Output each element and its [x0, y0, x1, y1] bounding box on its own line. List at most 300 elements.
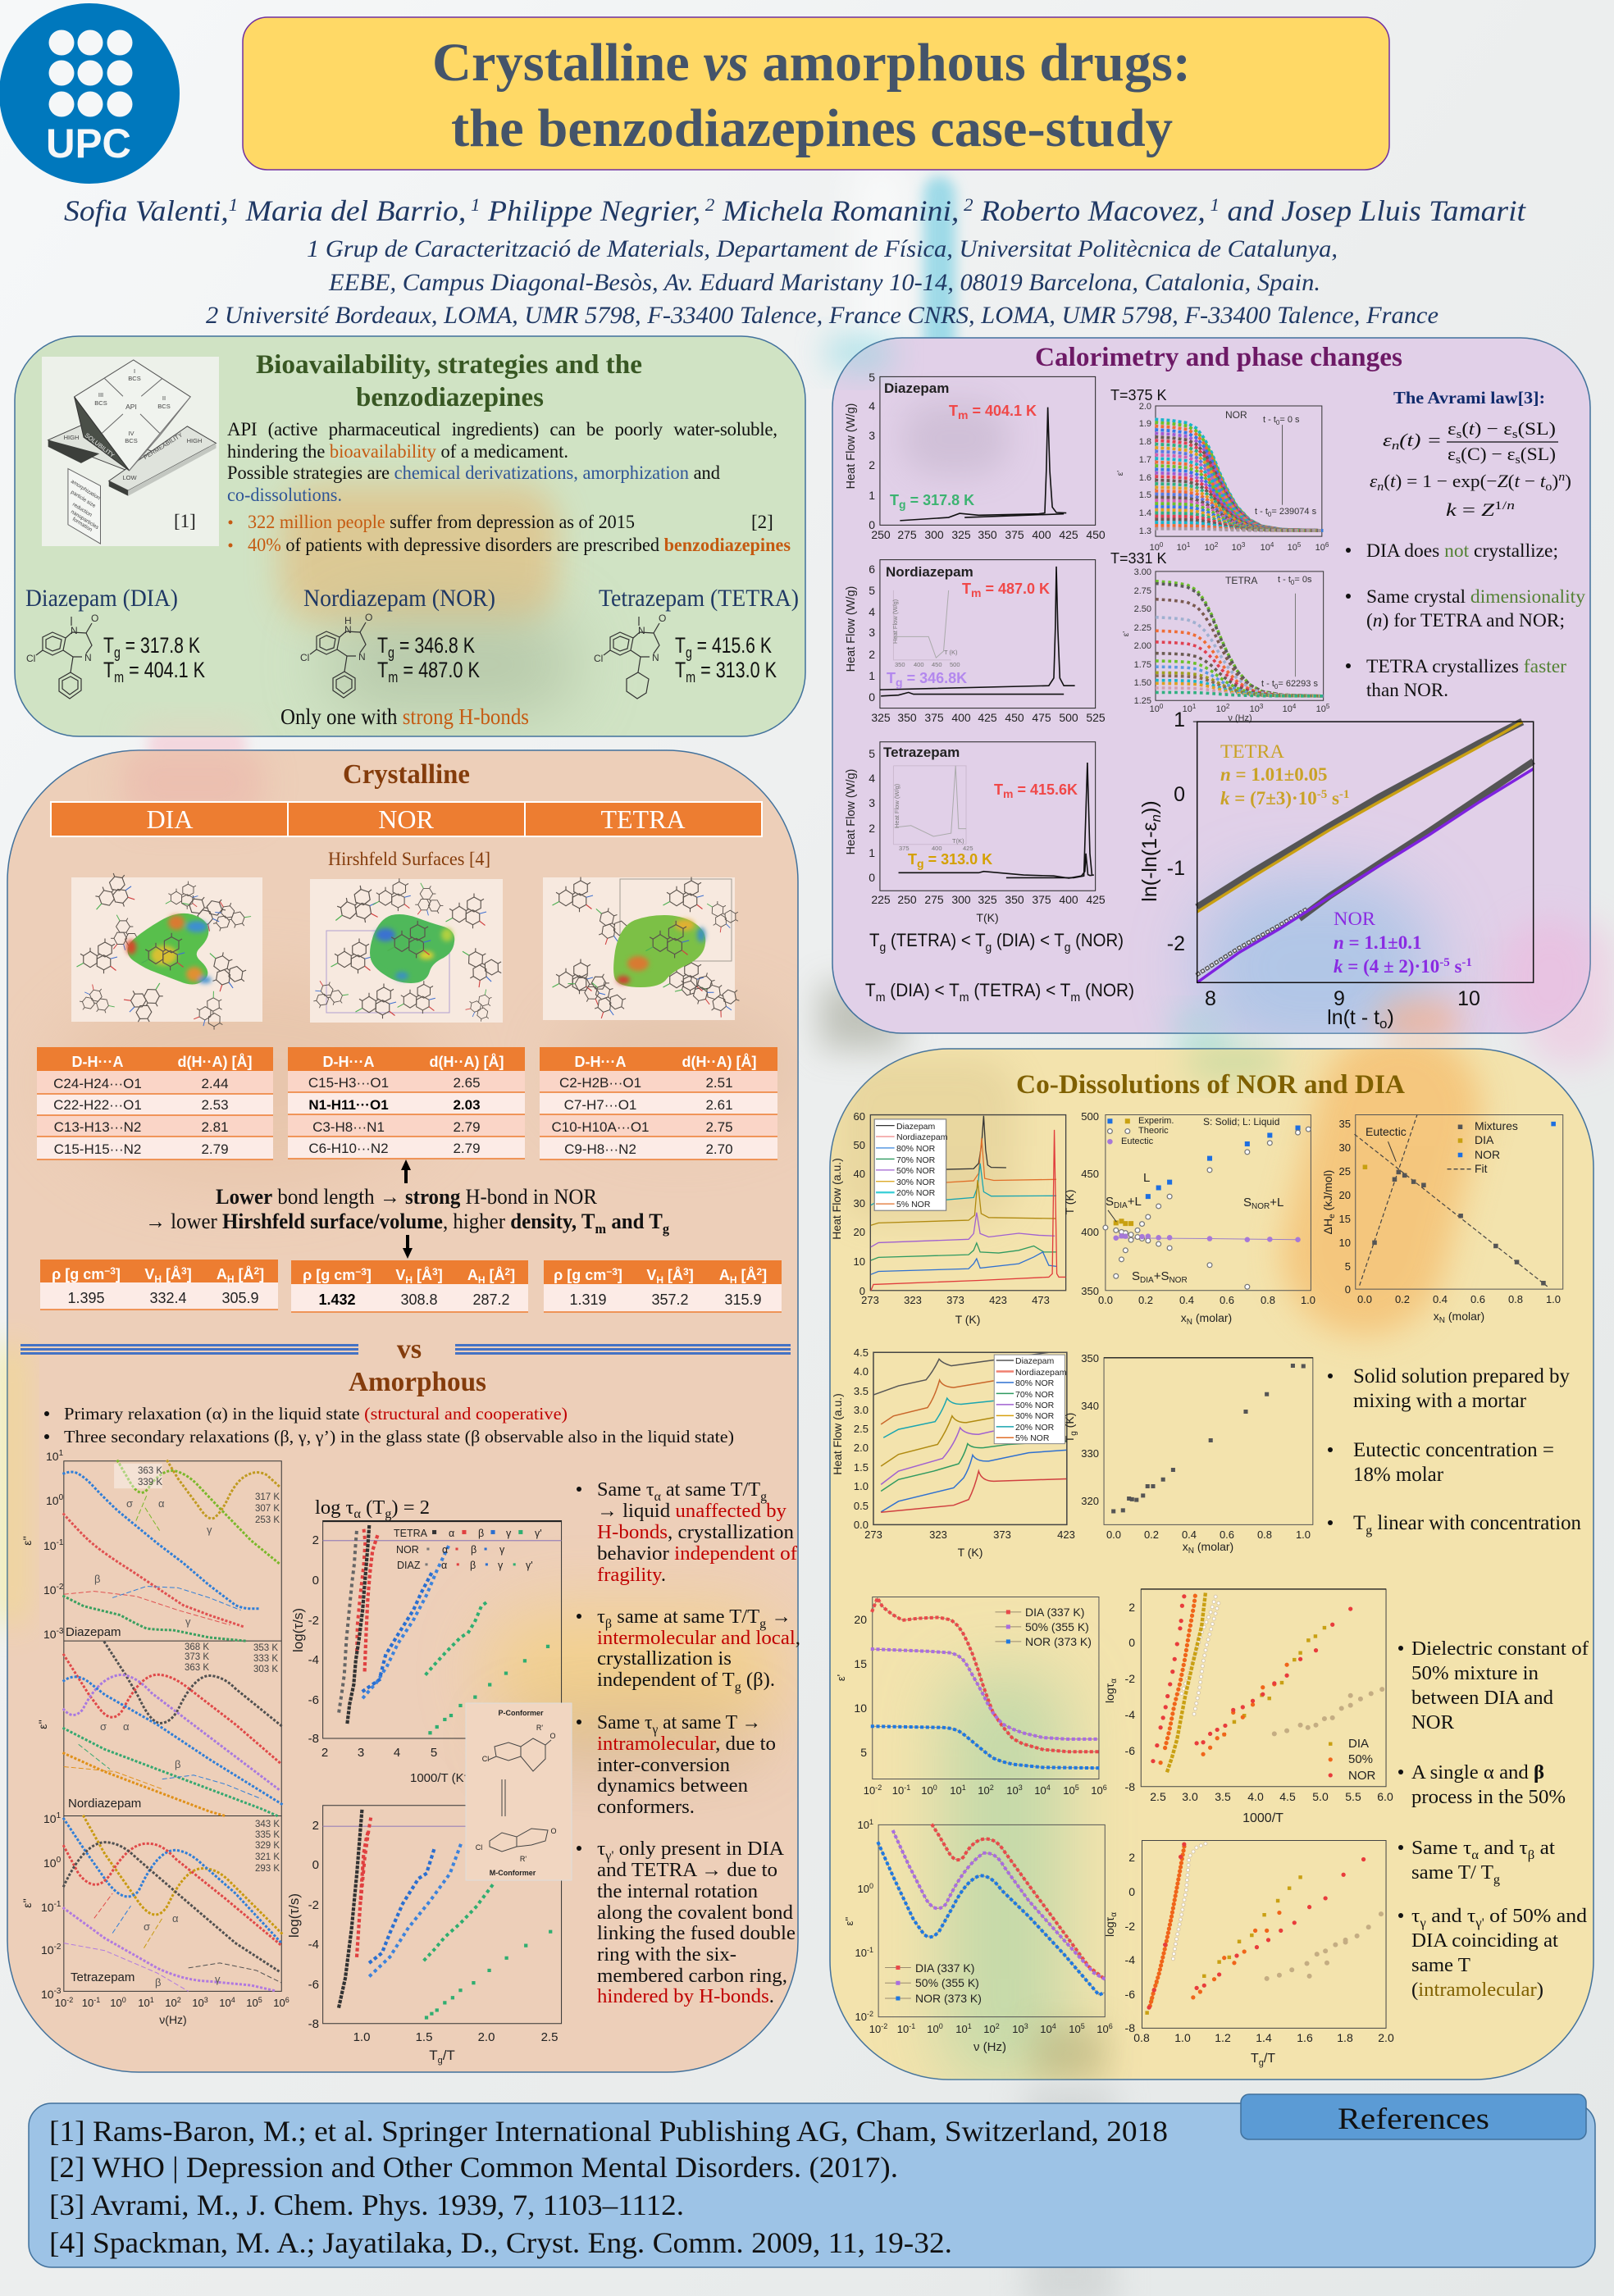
chart: time-resolved permittivity NOR: 10: [1288, 543, 1297, 553]
chart: melting enthalpy: [1321, 1115, 1563, 1325]
chart: heat flow glass transition: 3.0: [854, 1404, 869, 1416]
chart: melting enthalpy: 15: [1339, 1213, 1351, 1225]
chart: heat flow melting: 50% NOR: [896, 1166, 936, 1176]
chart: dielectric loss spectra: α: [172, 1912, 179, 1925]
chart: loss mixtures: 6: [1109, 2022, 1113, 2030]
table: H-bonds DIA: 2.44: [201, 1076, 229, 1091]
chart: relaxation map vs 1000/T: γ: [498, 1560, 504, 1571]
text block: relaxation conclusions: (β).: [741, 1669, 775, 1691]
chart: permittivity mixtures: 10: [892, 1784, 904, 1797]
drug: diazepam: m: [114, 669, 124, 686]
table: properties TETRA: 357.2: [651, 1292, 689, 1308]
chart: permittivity mixtures: 0: [933, 1784, 937, 1792]
text block: mixture bullets: NOR: [1411, 1711, 1455, 1733]
chart: DSC nordiazepam: 350: [895, 661, 905, 668]
chart: relaxation map vs Tg/T: T: [429, 2048, 438, 2063]
chart: dielectric loss spectra: α: [123, 1720, 130, 1733]
authors: Philippe Negrier,: [481, 194, 700, 227]
chart: DSC tetrazepam: 400: [1059, 893, 1078, 906]
chart: DSC diazepam: 4: [869, 399, 875, 412]
chart: DSC nordiazepam: 6: [869, 563, 875, 576]
chart: heat flow glass transition: 323: [929, 1528, 947, 1541]
chart: loss mixtures: 10: [1097, 2023, 1109, 2035]
chart: melting enthalpy: (molar): [1445, 1310, 1484, 1323]
drug: nordiazepam: = 487.0 K: [398, 658, 480, 682]
chart: relaxation map vs Tg/T: 2: [312, 1819, 319, 1833]
image: conformers inset: R': [536, 1724, 543, 1732]
chart: dielectric loss spectra: 10: [43, 1856, 57, 1870]
chart: time-resolved permittivity NOR: 10: [1205, 543, 1215, 553]
chart: DSC diazepam: 1: [869, 489, 875, 502]
table: properties NOR: [Å: [485, 1267, 504, 1283]
text block: relaxation conclusions: fragility.: [597, 1564, 666, 1586]
chart: phase diagram: S: Solid; L: Liquid: [1203, 1116, 1279, 1128]
text block: relaxation conclusions: membered carbon ring,: [597, 1965, 787, 1987]
heading: vs: vs: [397, 1334, 422, 1364]
chart: dielectric loss spectra: -1: [93, 1996, 100, 2004]
text block: reference list: [3] Avrami, M., J. Chem. Phys. 1939, 7, 1103–1112.: [49, 2189, 684, 2221]
text block: relaxation conclusions: along the covalent bond: [597, 1902, 793, 1924]
chart: DSC tetrazepam: 4: [869, 772, 875, 785]
text block: solid solution bullets: mixing with a mortar: [1353, 1390, 1527, 1412]
chart: dielectric loss spectra: 1: [150, 1996, 154, 2004]
chart: Avrami fit: 1: [1174, 708, 1185, 731]
table: properties DIA: ]: [259, 1266, 264, 1282]
chart: loss mixtures: 10: [855, 1947, 867, 1959]
chart: heat flow glass transition: 1.0: [854, 1480, 869, 1492]
table: H-bonds TETRA: [540, 1047, 777, 1159]
text block: mixture bullets: Dielectric constant of: [1411, 1638, 1589, 1660]
chart: Avrami fit: o: [1379, 1016, 1388, 1032]
chart: DSC tetrazepam: 425: [963, 845, 973, 852]
drug: diazepam: [25, 585, 205, 699]
chart: Tg vs concentration: g: [1069, 1431, 1078, 1436]
chart: dielectric loss spectra: Diazepam: [66, 1625, 121, 1639]
chart: permittivity mixtures: 6: [1103, 1784, 1107, 1792]
chart: mixture relaxation map vs Tg/T: 0.8: [1133, 2031, 1150, 2044]
chart: permittivity mixtures: 10: [1006, 1784, 1019, 1797]
chart: relaxation map vs 1000/T: 2: [312, 1533, 319, 1547]
text block: mixture bullets: at: [1534, 1837, 1555, 1859]
chart: dielectric loss spectra: 333 K: [253, 1654, 278, 1664]
chart: mixture relaxation map vs Tg/T: /T: [1264, 2052, 1275, 2066]
chart: dielectric loss spectra: 10: [192, 1997, 204, 2009]
text block: Avrami law equations: (C) − ε: [1461, 444, 1516, 464]
chart: melting enthalpy: 30: [1339, 1141, 1351, 1154]
drug: diazepam: N: [71, 625, 78, 636]
text block: mixture bullets: 50% mixture in: [1411, 1662, 1539, 1684]
chart: time-resolved permittivity TETRA: = 62293 s: [1278, 679, 1318, 689]
chart: Tg vs concentration: 0.8: [1257, 1528, 1272, 1541]
chart: permittivity mixtures: 10: [864, 1784, 875, 1797]
text block: intro: 322 million people suffer from depression as of 2015: [248, 512, 635, 532]
chart: Avrami fit: TETRA: [1220, 741, 1284, 762]
table: properties DIA: [Å: [162, 1266, 181, 1282]
drug: tetrazepam: T: [675, 633, 689, 658]
chart: relaxation map vs 1000/T: DIAZ: [397, 1560, 421, 1571]
chart: time-resolved permittivity NOR: 1: [1187, 541, 1191, 549]
text block: relaxations: Primary relaxation (α) in the liquid state (structural and cooperative): [64, 1404, 568, 1424]
chart: melting enthalpy: e: [1328, 1214, 1337, 1219]
chart: mixture relaxation map vs Tg/T: α: [1110, 1912, 1119, 1917]
authors: 1: [466, 194, 481, 215]
chart: dielectric loss spectra: 343 K: [255, 1820, 280, 1829]
chart: loss mixtures: 10: [983, 2023, 996, 2035]
chart: DSC tetrazepam: 1: [869, 846, 875, 859]
chart: time-resolved permittivity NOR: 10: [1150, 543, 1160, 553]
chart: Tg vs concentration: 330: [1081, 1447, 1099, 1460]
affiliations: [206, 235, 1438, 329]
chart: time-resolved permittivity TETRA: 10: [1283, 704, 1293, 714]
table: properties TETRA: H: [656, 1274, 663, 1286]
chart: dielectric loss spectra: 6: [285, 1996, 290, 2004]
chart: dielectric loss spectra: 339 K: [138, 1478, 162, 1487]
chart: heat flow glass transition: 4.0: [854, 1365, 869, 1378]
chart: mixture relaxation map vs 1000/T: -2: [1125, 1672, 1135, 1685]
chart: dielectric loss spectra: 363 K: [185, 1663, 209, 1673]
text block: solid solution bullets: linear with concentration: [1372, 1512, 1581, 1534]
chart: phase diagram: 450: [1081, 1168, 1099, 1180]
chart: DSC diazepam: Diazepam: [884, 380, 949, 396]
chart: heat flow melting: 50: [854, 1139, 865, 1151]
chart: dielectric loss spectra: 368 K: [185, 1642, 209, 1652]
chart: DSC nordiazepam: 375: [924, 711, 944, 724]
heading: crystalline: Crystalline: [343, 759, 470, 790]
chart: relaxation map vs Tg/T: [286, 1806, 562, 2066]
chart: DSC diazepam: 0: [869, 518, 875, 531]
table: H-bonds DIA: [37, 1047, 273, 1159]
chart: DSC nordiazepam: 5: [869, 584, 875, 597]
authors: 1: [229, 194, 238, 215]
table: properties NOR: A: [467, 1267, 478, 1283]
text block: mixture bullets: [1398, 1638, 1589, 2001]
chart: heat flow melting: 273: [861, 1294, 879, 1306]
chart: dielectric loss spectra: 373 K: [185, 1652, 209, 1662]
text block: Tg and Tm ordering: (DIA) < T: [886, 980, 960, 1000]
panel: co-dissolutions: [830, 1011, 1593, 2083]
image: conformers inset: P-Conformer: [498, 1709, 544, 1717]
chart: DSC tetrazepam: 3: [869, 796, 875, 809]
chart: mixture relaxation map vs 1000/T: [1103, 1589, 1393, 1825]
table: H-bonds DIA: D-H···A: [72, 1054, 123, 1070]
panel: bioavailability: [15, 336, 805, 754]
chart: dielectric loss spectra: 3: [204, 1996, 208, 2004]
chart: loss mixtures: -2: [881, 2022, 887, 2030]
chart: permittivity mixtures: 4: [1046, 1784, 1051, 1792]
table: H-bonds TETRA: d(H··A) [Å]: [682, 1054, 756, 1070]
chart: relaxation map vs 1000/T: -2: [308, 1614, 319, 1628]
chart: time-resolved permittivity TETRA: 10: [1150, 704, 1160, 714]
chart: phase diagram: S: [1243, 1196, 1252, 1210]
chart: Tg vs concentration: (K): [1063, 1413, 1076, 1431]
table: properties NOR: [291, 1260, 528, 1312]
chart: dielectric loss spectra: 307 K: [255, 1504, 280, 1514]
chart: time-resolved permittivity TETRA: 3: [1260, 703, 1264, 710]
chart: DSC tetrazepam: m: [1003, 787, 1013, 800]
chart: time-resolved permittivity NOR: 0: [1276, 419, 1280, 426]
drug: nordiazepam: [300, 585, 495, 698]
image: conformers inset: Cl: [482, 1755, 489, 1763]
text block: Avrami law equations: o: [1545, 481, 1552, 494]
text block: Avrami law equations: ε: [1370, 471, 1378, 491]
chart: time-resolved permittivity TETRA: ν (Hz): [1228, 713, 1252, 723]
chart: relaxation map vs Tg/T: 2.5: [541, 2030, 558, 2044]
text block: Tg and Tm ordering: (TETRA) < T: [886, 930, 986, 950]
title: Crystalline vs amorphous drugs:: [432, 33, 1191, 93]
text block: mixture bullets: γ': [1475, 1916, 1484, 1930]
icon: BCS diagram: BCS: [94, 399, 107, 407]
chart: heat flow melting: 5% NOR: [896, 1200, 931, 1210]
chart: melting enthalpy: 0.8: [1508, 1293, 1523, 1305]
chart: DSC nordiazepam: 500: [950, 661, 960, 668]
authors: Sofia Valenti,: [64, 194, 221, 227]
drug: nordiazepam: H: [344, 615, 352, 626]
table: properties TETRA: −3: [606, 1266, 618, 1278]
chart: DSC diazepam: T: [890, 492, 899, 508]
chart: time-resolved permittivity NOR: 10: [1177, 543, 1187, 553]
heading: amorphous: Amorphous: [349, 1367, 486, 1397]
chart: heat flow glass transition: 2.0: [854, 1442, 869, 1454]
table: properties DIA: 305.9: [221, 1290, 259, 1306]
chart: Avrami fit: )): [1138, 800, 1161, 814]
chart: heat flow glass transition: 0.0: [854, 1519, 869, 1531]
chart: phase diagram: 0.0: [1098, 1294, 1113, 1306]
chart: DSC tetrazepam: T(K): [976, 911, 999, 924]
table: properties NOR: 308.8: [400, 1292, 438, 1308]
chart: dielectric loss spectra: 0: [57, 1856, 62, 1865]
table: H-bonds TETRA: D-H···A: [575, 1054, 626, 1070]
chart: Avrami fit: ln(-ln(1-ε: [1138, 822, 1161, 902]
image: conformers inset: O: [550, 1827, 557, 1835]
chart: heat flow melting: Diazepam: [896, 1122, 936, 1132]
chart: relaxation map vs 1000/T: γ': [535, 1528, 542, 1539]
chart: permittivity mixtures: 5: [1075, 1784, 1079, 1792]
chart: dielectric loss spectra: σ: [144, 1920, 150, 1933]
chart: DSC tetrazepam: 400: [932, 845, 942, 852]
text block: mixture bullets: g: [1493, 1873, 1500, 1887]
text block: bond length conclusion: Lower bond length → strong H-bond in NOR: [216, 1185, 598, 1209]
image: conformers inset: [466, 1703, 572, 1880]
chart: time-resolved permittivity TETRA: 4: [1293, 703, 1297, 710]
chart: DSC diazepam: 275: [897, 528, 917, 541]
chart: heat flow melting: T (K): [955, 1313, 980, 1326]
chart: permittivity mixtures: 10: [1034, 1784, 1046, 1797]
chart: mixture relaxation map vs 1000/T: 2: [1128, 1601, 1135, 1614]
icon: BCS diagram: LOW: [122, 474, 137, 481]
chart: mixture relaxation map vs 1000/T: 6.0: [1377, 1790, 1393, 1803]
table: properties DIA: [40, 1260, 278, 1310]
table: H-bonds TETRA: 2.61: [705, 1097, 733, 1113]
chart: heat flow melting: 473: [1032, 1294, 1050, 1306]
chart: phase diagram: S: [1132, 1269, 1140, 1283]
chart: time-resolved permittivity TETRA: 2.75: [1134, 586, 1151, 596]
chart: heat flow glass transition: 423: [1057, 1528, 1075, 1541]
chart: dielectric loss spectra: 10: [43, 1628, 57, 1641]
chart: time-resolved permittivity TETRA: 10: [1250, 704, 1260, 714]
image: NOR Hirshfeld surface: [310, 878, 508, 1026]
chart: loss mixtures: 10: [858, 1883, 869, 1895]
chart: relaxation map vs 1000/T: ): [472, 1771, 476, 1785]
chart: heat flow glass transition: 3.5: [854, 1385, 869, 1397]
chart: DSC nordiazepam: = 346.8K: [903, 670, 967, 686]
chart: heat flow glass transition: 0.5: [854, 1500, 869, 1512]
chart: time-resolved permittivity TETRA: 1.75: [1134, 660, 1151, 670]
text block: solid solution bullets: Eutectic concentration =: [1353, 1439, 1554, 1461]
chart: DSC tetrazepam: Heat Flow (W/g): [845, 769, 858, 854]
chart: DSC nordiazepam: m: [971, 586, 981, 599]
chart: melting enthalpy: 10: [1339, 1237, 1351, 1249]
chart: mixture relaxation map vs 1000/T: 5.5: [1345, 1790, 1361, 1803]
table: properties DIA: ]: [187, 1266, 192, 1282]
chart: time-resolved permittivity NOR: = 0 s: [1279, 415, 1300, 425]
icon: BCS diagram: API: [125, 403, 137, 411]
text block: Avrami law equations: k = Z: [1446, 499, 1491, 520]
chart: mixture relaxation map vs Tg/T: T: [1251, 2052, 1259, 2066]
chart: time-resolved permittivity TETRA: TETRA: [1225, 575, 1257, 586]
table: H-bonds DIA: 2.79: [201, 1141, 229, 1157]
chart: permittivity mixtures: -2: [875, 1784, 882, 1792]
chart: melting enthalpy: DIA: [1475, 1133, 1494, 1146]
chart: dielectric loss spectra: β: [155, 1976, 161, 1988]
chart: DSC tetrazepam: 325: [978, 893, 997, 906]
text block: mixture bullets: A single α and β: [1411, 1761, 1544, 1784]
chart: Avrami fit: -1: [1461, 956, 1472, 969]
drug: diazepam: N: [84, 652, 92, 663]
table: H-bonds TETRA: 2.75: [705, 1119, 733, 1135]
chart: heat flow melting: 20: [854, 1226, 865, 1238]
icon: BCS diagram: nanoparticles: [70, 509, 100, 531]
chart: phase diagram: 400: [1081, 1226, 1099, 1238]
chart: phase diagram: NOR: [1169, 1276, 1188, 1285]
table: H-bonds NOR: 2.03: [453, 1097, 481, 1113]
chart: DSC diazepam: 250: [871, 528, 891, 541]
text block: crystallization bullets: Same crystal dimensionality: [1366, 586, 1586, 607]
text block: solid solution bullets: g: [1366, 1524, 1372, 1538]
chart: time-resolved permittivity TETRA: 10: [1316, 704, 1326, 714]
chart: loss mixtures: 1: [968, 2022, 972, 2030]
chart: heat flow glass transition: 70% NOR: [1015, 1390, 1055, 1400]
drug: diazepam: O: [91, 613, 98, 624]
chart: mixture relaxation map vs Tg/T: 1.4: [1256, 2031, 1272, 2044]
chart: relaxation map vs Tg/T: -6: [308, 1978, 319, 1992]
chart: time-resolved permittivity TETRA: 10: [1183, 704, 1192, 714]
chart: mixture relaxation map vs Tg/T: -8: [1125, 2021, 1135, 2034]
chart: permittivity mixtures: ε': [835, 1674, 847, 1681]
chart: Tg vs concentration: [1063, 1352, 1313, 1556]
chart: DSC nordiazepam: [845, 560, 1106, 724]
chart: relaxation map vs Tg/T: -4: [308, 1938, 319, 1952]
drug: tetrazepam: = 415.6 K: [692, 633, 772, 658]
chart: Avrami fit: s: [1327, 788, 1339, 809]
chart: heat flow melting: 40: [854, 1168, 865, 1180]
chart: DSC diazepam: m: [958, 408, 968, 421]
chart: dielectric loss spectra: 10: [219, 1997, 231, 2009]
text block: mixture bullets: of 50% and: [1484, 1905, 1587, 1927]
chart: loss mixtures: 1: [869, 1818, 873, 1826]
chart: melting enthalpy: 0.4: [1433, 1293, 1448, 1305]
chart: DSC tetrazepam: 0: [869, 871, 875, 884]
chart: permittivity mixtures: 50% (355 K): [1025, 1620, 1089, 1633]
text block: mixture bullets: same T/ T: [1411, 1861, 1492, 1884]
chart: dielectric loss spectra: 303 K: [253, 1665, 278, 1674]
table: H-bonds NOR: D-H···A: [323, 1054, 374, 1070]
chart: phase diagram: Theoric: [1138, 1126, 1169, 1136]
chart: heat flow glass transition: 373: [993, 1528, 1011, 1541]
chart: loss mixtures: ε'': [843, 1917, 855, 1925]
chart: time-resolved permittivity TETRA: ε': [1122, 631, 1131, 636]
chart: heat flow melting: 10: [854, 1255, 865, 1268]
icon: BCS diagram: reduction: [71, 502, 93, 518]
chart: relaxation map vs 1000/T: 4: [394, 1746, 400, 1760]
chart: permittivity mixtures: 3: [1019, 1784, 1023, 1792]
chart: mixture relaxation map vs Tg/T: 2: [1128, 1851, 1135, 1864]
chart: time-resolved permittivity NOR: 1.4: [1139, 508, 1151, 518]
chart: time-resolved permittivity TETRA: 1.50: [1134, 678, 1151, 688]
chart: permittivity mixtures: 10: [854, 1702, 867, 1715]
text block: relaxation conclusions: at same T →: [658, 1711, 761, 1733]
chart: loss mixtures: 5: [1081, 2022, 1085, 2030]
chart: phase diagram: 0.4: [1179, 1294, 1194, 1306]
chart: Tg vs concentration: 0.4: [1182, 1528, 1197, 1541]
chart: Avrami fit: 10: [1457, 987, 1480, 1010]
table: H-bonds DIA: C13-H13···N2: [54, 1119, 141, 1135]
text block: relaxation conclusions: linking the fused double: [597, 1922, 796, 1944]
table: H-bonds NOR: [288, 1047, 525, 1159]
chart: time-resolved permittivity TETRA: 2: [1226, 703, 1230, 710]
table: H-bonds DIA: C15-H15···N2: [54, 1141, 141, 1157]
chart: Tg vs concentration: N: [1188, 1547, 1194, 1556]
text block: mixture bullets: process in the 50%: [1411, 1786, 1566, 1808]
chart: relaxation map vs Tg/T: -2: [308, 1898, 319, 1912]
text block: relaxations: Three secondary relaxations (β, γ, γ’) in the glass state (β observable also in the liquid state): [64, 1427, 734, 1446]
table header: compounds: TETRA: [600, 804, 686, 834]
authors: Michela Romanini,: [714, 194, 959, 227]
table: properties NOR: 1.432: [318, 1292, 356, 1308]
chart: melting enthalpy: N: [1439, 1316, 1445, 1325]
chart: permittivity mixtures: DIA (337 K): [1025, 1606, 1084, 1619]
text block: relaxation conclusions: behavior independent of: [597, 1542, 798, 1565]
text block: relaxation conclusions: dynamics between: [597, 1774, 748, 1797]
chart: relaxation map vs Tg/T: 1.5: [416, 2030, 432, 2044]
chart: Tg vs concentration: 340: [1081, 1400, 1099, 1412]
drug: tetrazepam: O: [659, 613, 666, 624]
chart: loss mixtures: 10: [869, 2023, 881, 2035]
chart: relaxation map vs 1000/T: [290, 1497, 562, 1785]
text block: crystallization bullets: (n) for TETRA and NOR;: [1366, 610, 1565, 631]
chart: Avrami fit: s: [1450, 956, 1461, 977]
table: properties DIA: A: [217, 1266, 227, 1282]
chart: Avrami fit: 9: [1334, 987, 1345, 1010]
chart: dielectric loss spectra: -1: [57, 1538, 64, 1547]
drug: nordiazepam: N: [344, 624, 352, 636]
icon: UPC logo: UPC: [46, 121, 131, 166]
chart: relaxation map vs 1000/T: -1: [464, 1771, 472, 1780]
text block: intro: [227, 419, 791, 555]
chart: phase diagram: S: [1106, 1195, 1114, 1209]
chart: permittivity mixtures: 1: [962, 1784, 966, 1792]
chart: dielectric loss spectra: 10: [82, 1997, 93, 2009]
chart: dielectric loss spectra: 10: [41, 1901, 54, 1914]
chart: phase diagram: +L: [1128, 1195, 1142, 1209]
text block: mixture bullets: and τ: [1479, 1837, 1528, 1859]
chart: DSC diazepam: 375: [1005, 528, 1024, 541]
chart: DSC diazepam: 2: [869, 458, 875, 472]
text block: reference list: [49, 2115, 1168, 2259]
chart: relaxation map vs 1000/T: γ: [506, 1528, 512, 1539]
text block: solid solution bullets: 18% molar: [1353, 1464, 1444, 1486]
drug: diazepam: Diazepam (DIA): [25, 585, 178, 612]
drug: tetrazepam: = 313.0 K: [695, 658, 777, 682]
